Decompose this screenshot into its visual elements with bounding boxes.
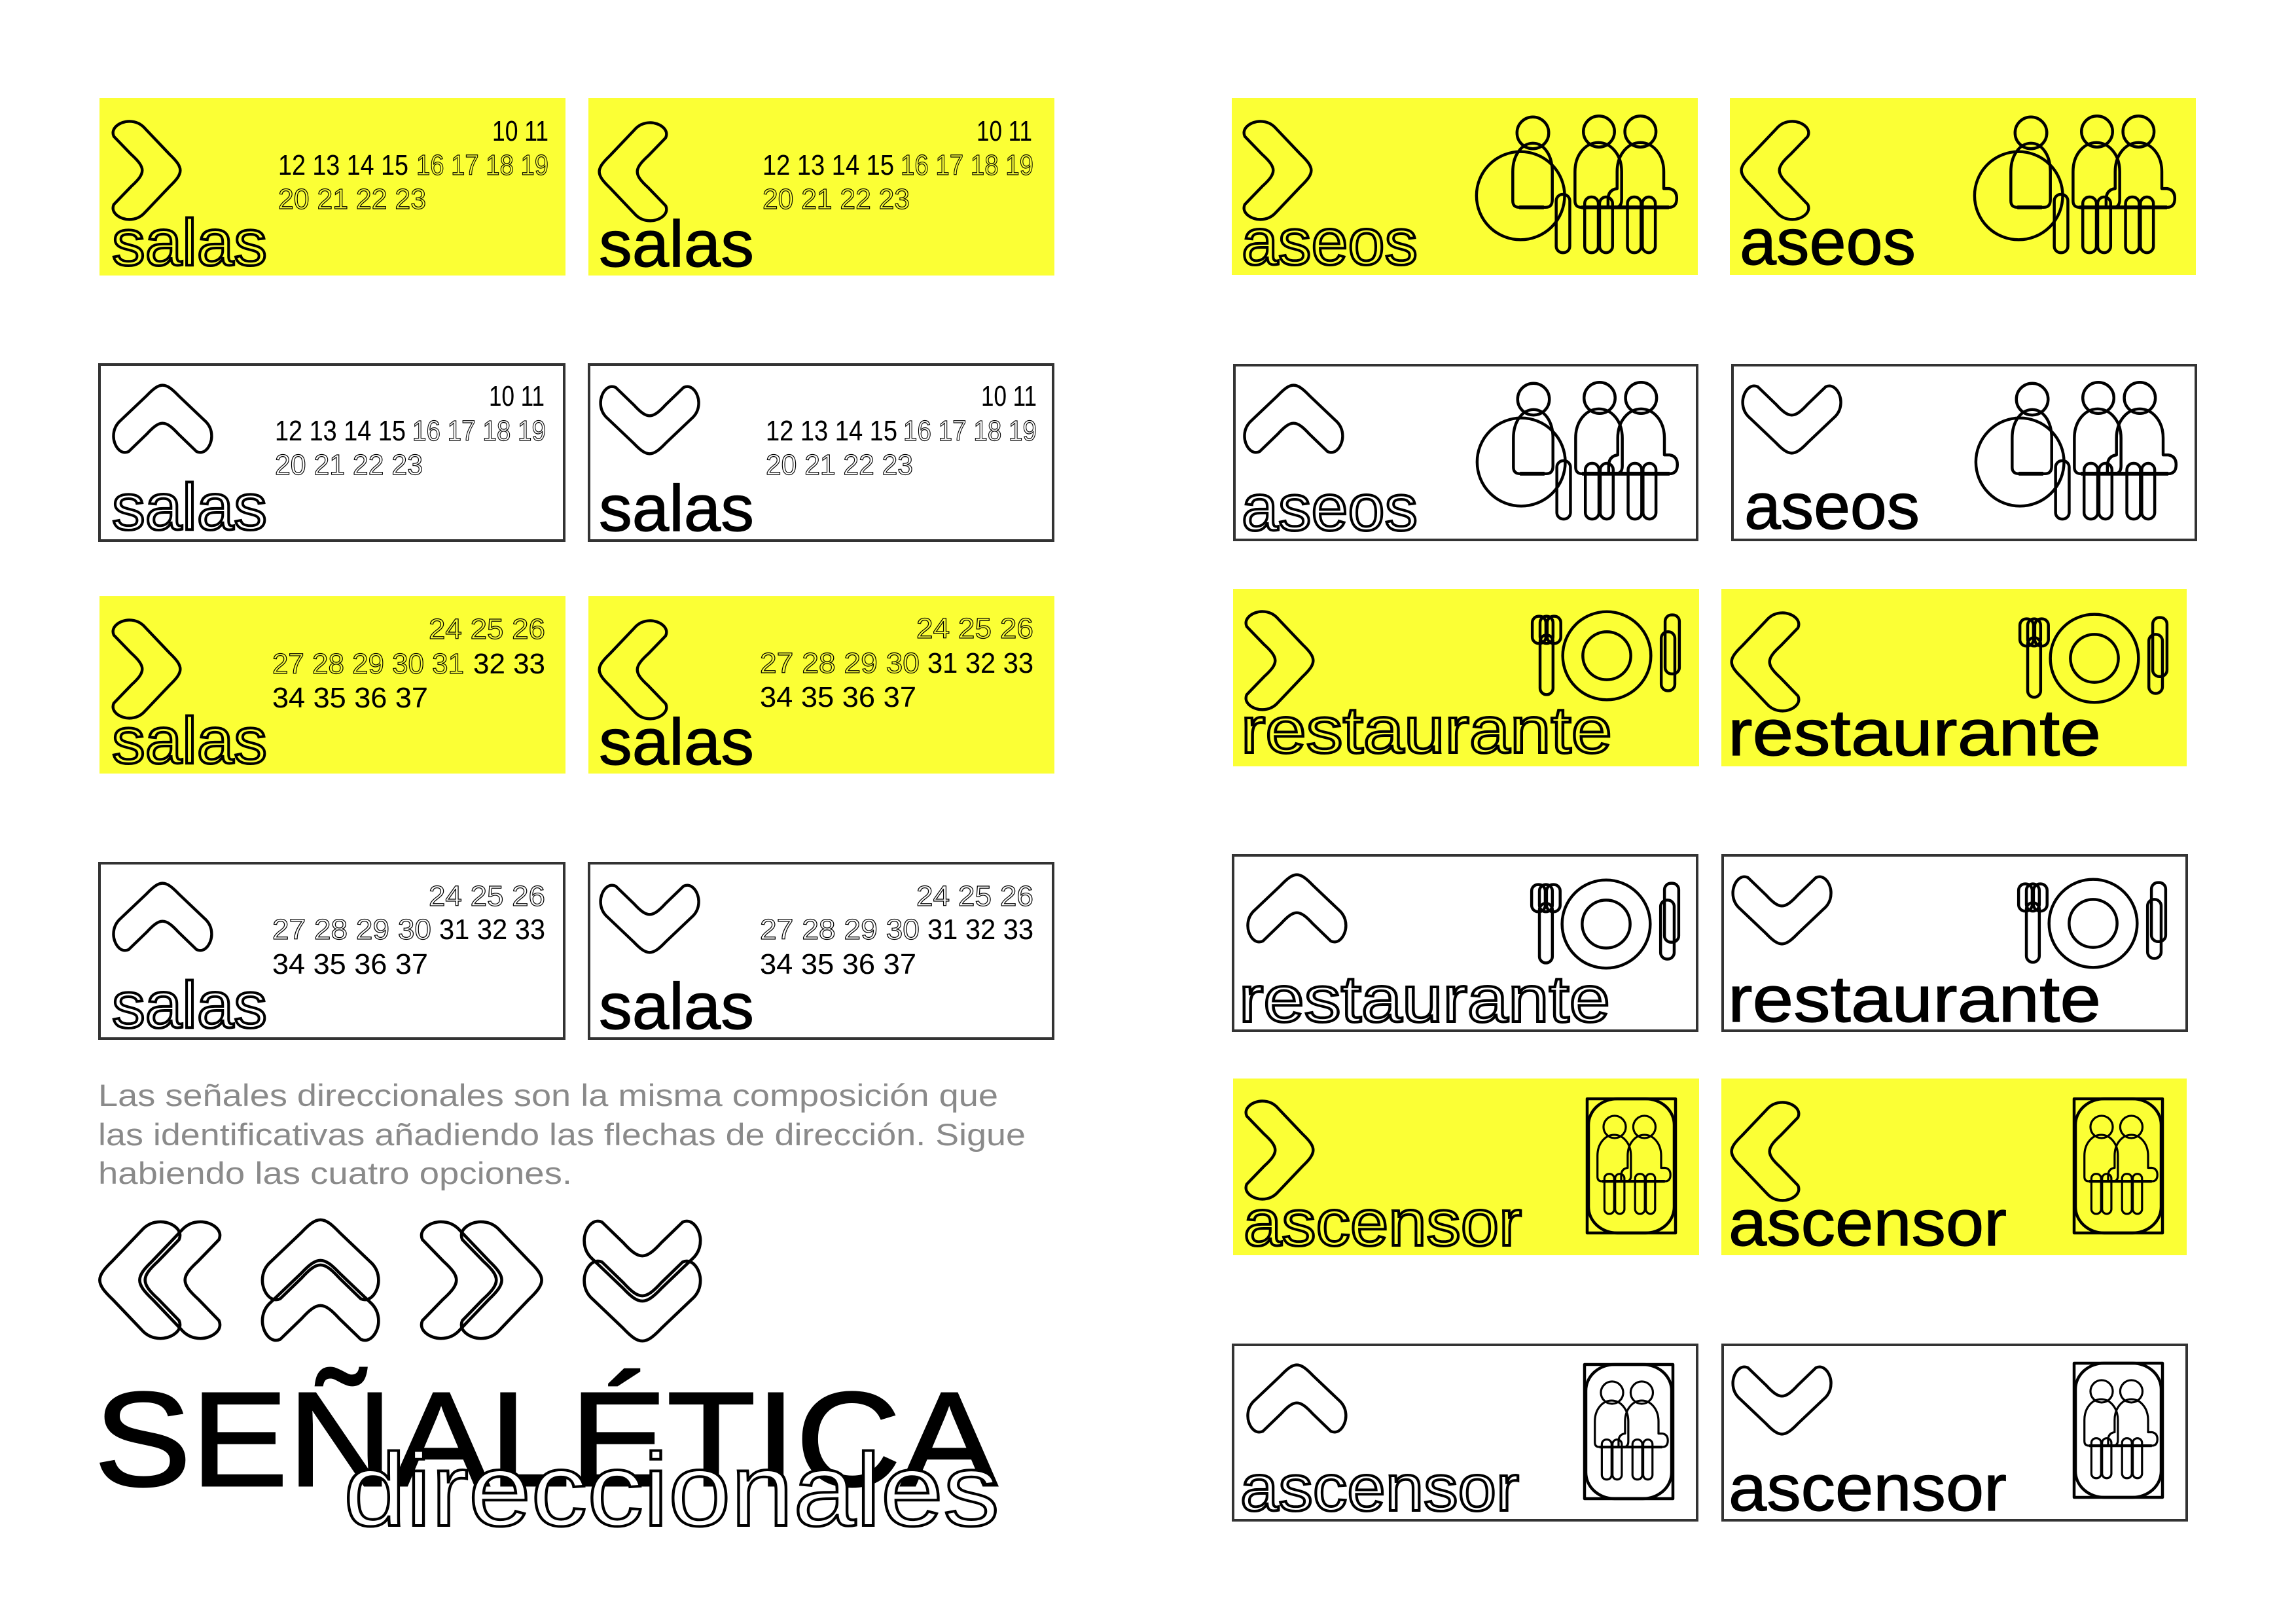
room numbers: 20 21 22 23 bbox=[766, 449, 913, 481]
label: restaurante: restaurante bbox=[1728, 963, 2101, 1036]
title: SEÑALÉTICA: SEÑALÉTICA bbox=[94, 1364, 997, 1514]
description text: las identificativas añadiendo las flechas de dirección. Sigue bbox=[98, 1117, 1026, 1152]
arrow: left bbox=[1732, 613, 1799, 711]
arrow: left bbox=[1742, 121, 1808, 219]
label: ascensor: ascensor bbox=[1244, 1186, 1522, 1260]
room numbers: 32 33 bbox=[473, 648, 545, 680]
room numbers: 20 21 22 23 bbox=[762, 183, 910, 215]
panel: aseos left yellow bbox=[1730, 98, 2196, 279]
label: salas: salas bbox=[112, 471, 267, 544]
label: restaurante: restaurante bbox=[1239, 963, 1610, 1036]
room numbers: 27 28 29 30 31 bbox=[272, 648, 464, 680]
arrow: down bbox=[1733, 877, 1831, 944]
arrow: up bbox=[113, 385, 211, 452]
description text: habiendo las cuatro opciones. bbox=[98, 1156, 572, 1190]
panel: aseos down white bbox=[1732, 365, 2196, 543]
room numbers: 12 13 14 15 bbox=[275, 415, 406, 447]
room numbers: 24 25 26 bbox=[916, 613, 1033, 645]
arrow pair: double up bbox=[262, 1220, 378, 1340]
label: salas: salas bbox=[599, 472, 754, 545]
arrow: left bbox=[600, 122, 666, 221]
arrow pair: double left bbox=[99, 1222, 220, 1338]
label: salas: salas bbox=[112, 206, 267, 279]
room numbers: 12 13 14 15 bbox=[766, 415, 897, 447]
room numbers bbox=[278, 115, 548, 215]
arrow: down bbox=[1733, 1367, 1831, 1434]
room numbers: 10 11 bbox=[492, 115, 548, 147]
panel: salas up 10-23 white bbox=[99, 365, 564, 544]
label: ascensor: ascensor bbox=[1729, 1186, 2007, 1260]
room numbers: 27 28 29 30 bbox=[760, 914, 920, 946]
description text bbox=[98, 1078, 1026, 1190]
room numbers: 20 21 22 23 bbox=[275, 449, 423, 481]
room numbers bbox=[272, 880, 545, 980]
label: salas: salas bbox=[599, 970, 754, 1043]
arrow: down bbox=[1743, 386, 1841, 453]
room numbers bbox=[760, 880, 1033, 980]
arrow pair: double down bbox=[584, 1221, 700, 1341]
room numbers bbox=[272, 613, 545, 714]
description text: Las señales direccionales son la misma composición que bbox=[98, 1078, 998, 1113]
room numbers: 16 17 18 19 bbox=[903, 415, 1037, 447]
arrow: right bbox=[1244, 121, 1311, 219]
arrow pair: double right bbox=[422, 1222, 542, 1338]
room numbers: 12 13 14 15 bbox=[762, 149, 894, 181]
subtitle: direccionales: direccionales bbox=[344, 1433, 999, 1548]
arrow: up bbox=[1244, 385, 1342, 452]
room numbers bbox=[275, 380, 546, 481]
room numbers: 10 11 bbox=[977, 115, 1032, 147]
arrow: left bbox=[1732, 1102, 1799, 1200]
panel: salas left 10-23 yellow bbox=[588, 98, 1054, 281]
label: salas: salas bbox=[112, 704, 267, 777]
label: restaurante: restaurante bbox=[1728, 696, 2101, 770]
label: salas: salas bbox=[599, 207, 754, 281]
room numbers: 16 17 18 19 bbox=[416, 149, 548, 181]
arrow: down bbox=[601, 387, 699, 454]
label: salas: salas bbox=[599, 705, 754, 779]
room numbers: 27 28 29 30 bbox=[760, 647, 920, 679]
panel: restaurante down white bbox=[1723, 855, 2187, 1036]
panel: aseos up white bbox=[1234, 365, 1697, 544]
panel: ascensor right yellow bbox=[1233, 1079, 1699, 1260]
icon: elevator bbox=[1585, 1364, 1673, 1499]
room numbers: 31 32 33 bbox=[927, 914, 1033, 946]
panel: aseos right yellow bbox=[1232, 98, 1698, 279]
room numbers: 12 13 14 15 bbox=[278, 149, 408, 181]
room numbers: 24 25 26 bbox=[429, 613, 545, 645]
label: ascensor: ascensor bbox=[1240, 1452, 1519, 1525]
room numbers: 27 28 29 30 bbox=[272, 914, 431, 946]
panel: salas down 10-23 white bbox=[589, 365, 1053, 545]
panel: ascensor up white bbox=[1233, 1345, 1697, 1525]
label: aseos: aseos bbox=[1744, 470, 1920, 543]
room numbers: 20 21 22 23 bbox=[278, 183, 426, 215]
icon: accessible and two people bbox=[1975, 116, 2175, 253]
label: restaurante: restaurante bbox=[1241, 694, 1612, 767]
arrow: down bbox=[601, 885, 699, 952]
panel: restaurante left yellow bbox=[1721, 589, 2187, 770]
room numbers: 31 32 33 bbox=[927, 647, 1033, 679]
room numbers bbox=[760, 613, 1033, 713]
arrow: right bbox=[1246, 611, 1313, 709]
room numbers: 34 35 36 37 bbox=[760, 948, 916, 980]
arrow: up bbox=[1247, 1365, 1346, 1432]
panel: ascensor down white bbox=[1723, 1345, 2187, 1525]
icon: accessible and two people bbox=[1477, 116, 1677, 253]
icon: accessible and two people bbox=[1477, 382, 1677, 519]
icon: elevator bbox=[1587, 1099, 1676, 1233]
room numbers: 34 35 36 37 bbox=[760, 681, 916, 713]
arrow: right bbox=[113, 620, 180, 718]
icon: plate and cutlery bbox=[2018, 880, 2166, 967]
icon: plate and cutlery bbox=[1532, 612, 1679, 700]
room numbers: 24 25 26 bbox=[916, 880, 1033, 912]
room numbers bbox=[762, 115, 1033, 215]
panel: restaurante right yellow bbox=[1233, 589, 1699, 767]
room numbers: 16 17 18 19 bbox=[901, 149, 1033, 181]
panel: salas up 24-37 white bbox=[99, 863, 564, 1042]
label: ascensor: ascensor bbox=[1729, 1452, 2007, 1525]
label: aseos: aseos bbox=[1242, 471, 1418, 544]
icon: elevator bbox=[2074, 1099, 2162, 1233]
panel: restaurante up white bbox=[1233, 855, 1697, 1036]
icon: plate and cutlery bbox=[1532, 880, 1679, 968]
icon: plate and cutlery bbox=[2020, 615, 2167, 702]
icon: elevator bbox=[2074, 1363, 2162, 1497]
label: aseos: aseos bbox=[1740, 205, 1916, 279]
room numbers: 34 35 36 37 bbox=[272, 948, 428, 980]
panel: salas right 10-23 yellow bbox=[99, 98, 565, 279]
room numbers: 10 11 bbox=[489, 380, 545, 412]
room numbers: 16 17 18 19 bbox=[412, 415, 546, 447]
arrow: up bbox=[113, 883, 211, 950]
arrow: right bbox=[113, 121, 180, 219]
room numbers: 24 25 26 bbox=[429, 880, 545, 912]
arrow: left bbox=[600, 620, 666, 719]
arrow: right bbox=[1246, 1101, 1313, 1199]
arrow: up bbox=[1247, 875, 1346, 942]
panel: salas right 24-37 yellow bbox=[99, 596, 565, 777]
panel: salas left 24-37 yellow bbox=[588, 596, 1054, 779]
label: salas: salas bbox=[112, 969, 267, 1042]
room numbers: 34 35 36 37 bbox=[272, 682, 428, 714]
panel: salas down 24-37 white bbox=[589, 863, 1053, 1043]
room numbers bbox=[766, 380, 1037, 481]
room numbers: 10 11 bbox=[981, 380, 1037, 412]
icon: accessible and two people bbox=[1976, 382, 2176, 519]
room numbers: 31 32 33 bbox=[439, 914, 545, 946]
panel: ascensor left yellow bbox=[1721, 1079, 2187, 1260]
label: aseos: aseos bbox=[1242, 205, 1418, 279]
